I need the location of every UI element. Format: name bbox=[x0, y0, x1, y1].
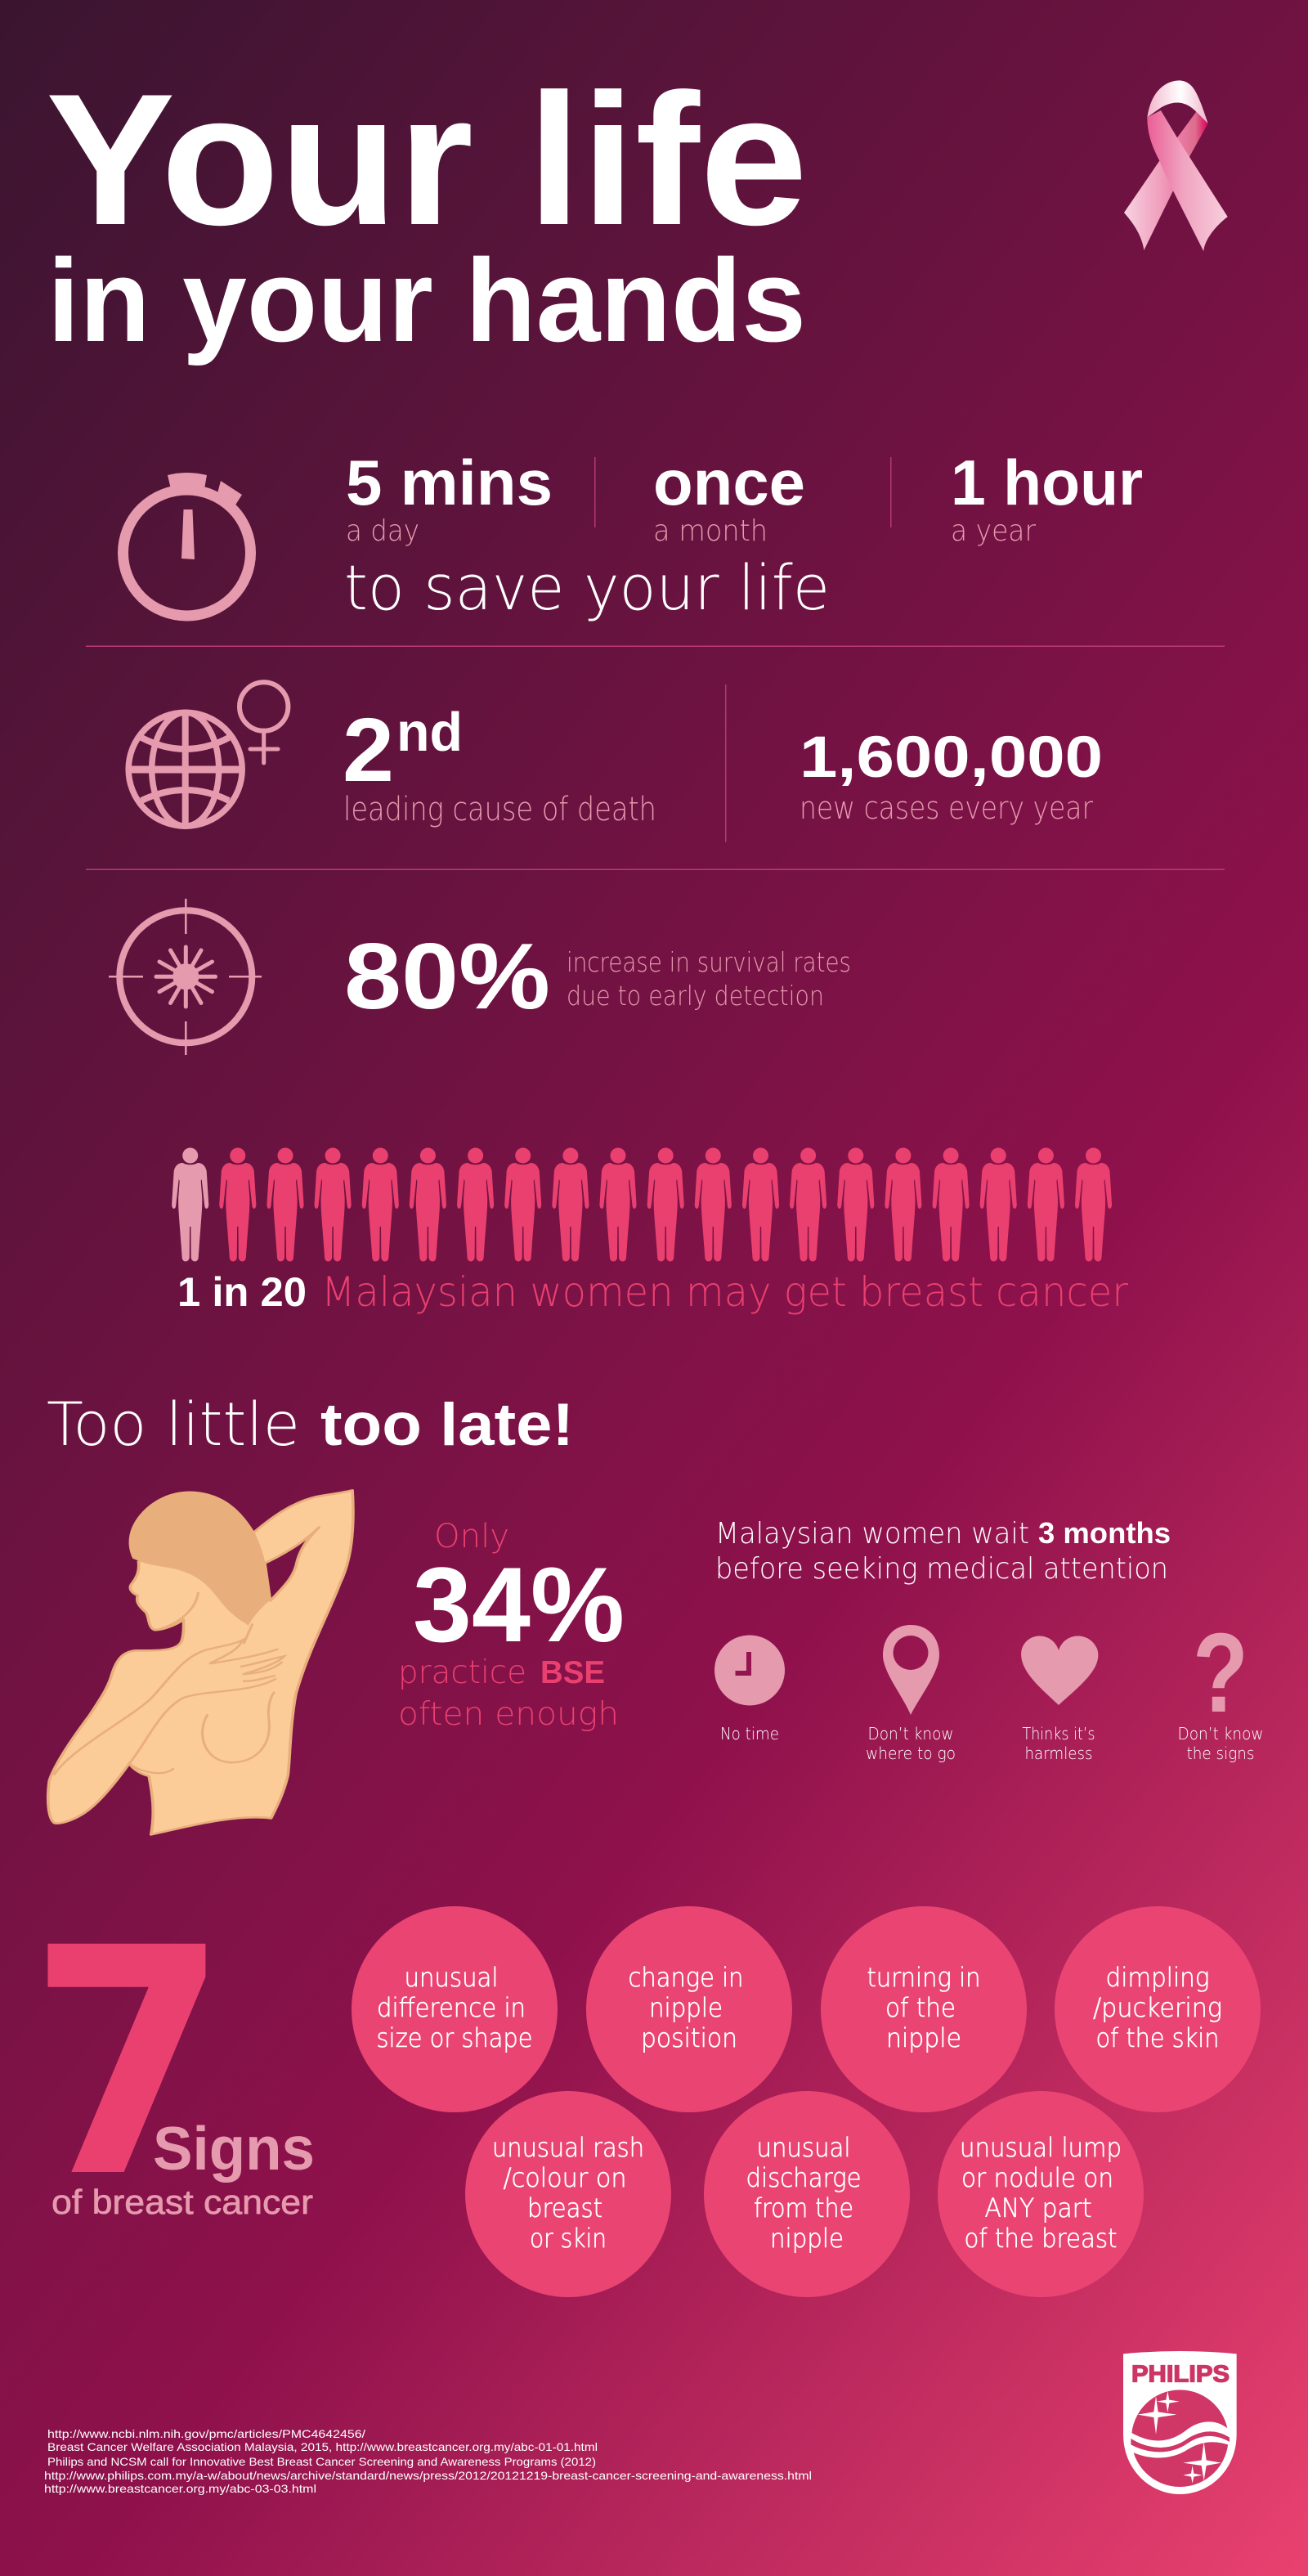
reason: thinks it's harmless: Thinks it’s bbox=[1022, 1724, 1095, 1744]
sign: unusual difference: difference in bbox=[377, 1992, 526, 2023]
stat: only 34% practice BSE: 34% bbox=[413, 1545, 625, 1664]
title: Your life bbox=[46, 55, 808, 264]
title bbox=[46, 55, 808, 366]
sign: unusual difference bbox=[352, 1906, 558, 2112]
text: 1 in 20 Malaysian women: Malaysian women may get breast cancer bbox=[321, 1268, 1128, 1316]
sign: unusual discharge: discharge bbox=[746, 2162, 862, 2193]
text: to save your life: to save your life bbox=[344, 551, 830, 624]
stat: 2nd bbox=[343, 700, 656, 828]
sign: nipple position: change in bbox=[628, 1962, 744, 1993]
sources: Philips and NCSM call for Innovative Best Breast Cancer Screening and Awareness Programs (2012) bbox=[47, 2455, 596, 2468]
text: survival description: increase in survival rates bbox=[567, 946, 851, 978]
sign: unusual lump: or nodule on bbox=[961, 2162, 1113, 2193]
sign: unusual rash bbox=[465, 2091, 671, 2297]
stat: 1,600,000: new cases every year bbox=[800, 790, 1093, 826]
text: women wait 3 months: before seeking medical attention bbox=[715, 1552, 1168, 1586]
sign: unusual discharge: nipple bbox=[770, 2223, 844, 2254]
sign: turning in nipple: of the bbox=[885, 1992, 956, 2023]
heading: 7 signs of breast cancer: Signs bbox=[153, 2114, 315, 2183]
stat: only 34% practice BSE: practice bbox=[398, 1654, 526, 1691]
sign: unusual lump: ANY part bbox=[984, 2192, 1092, 2224]
text: women wait 3 months: 3 months bbox=[1038, 1516, 1171, 1550]
reason: no time bbox=[714, 1636, 785, 1744]
reason: no time: No time bbox=[720, 1724, 779, 1744]
stat: 1,600,000: 1,600,000 bbox=[800, 725, 1103, 790]
stat: only 34% practice BSE: often enough bbox=[398, 1696, 619, 1733]
text: women wait 3 months bbox=[715, 1516, 1171, 1586]
sign: nipple position: position bbox=[641, 2022, 737, 2053]
stat: once a month bbox=[653, 447, 805, 548]
sources bbox=[44, 2427, 812, 2495]
logo: Philips shield bbox=[1123, 2351, 1237, 2494]
stat: 2nd: leading cause of death bbox=[343, 791, 656, 828]
icon: globe with female symbol bbox=[128, 682, 288, 826]
sign: unusual lump: of the breast bbox=[965, 2223, 1117, 2254]
sources: http://www.philips.com.my/a-w/about/news/archive/standard/news/press/2012/20121219-breast-cancer-screening-and-awareness.html bbox=[44, 2469, 812, 2482]
title: in your hands bbox=[47, 235, 806, 366]
reason: thinks it's harmless: harmless bbox=[1025, 1744, 1092, 1763]
sign: unusual rash: /colour on bbox=[504, 2162, 626, 2193]
stat: once a month: once bbox=[653, 447, 805, 518]
icon: map pin bbox=[883, 1625, 939, 1715]
sign: nipple position: nipple bbox=[649, 1992, 723, 2023]
stat: 1 hour a year: a year bbox=[951, 514, 1036, 548]
sign: turning in nipple bbox=[821, 1906, 1027, 2112]
sign: unusual discharge: from the bbox=[754, 2192, 853, 2224]
heading: 7 signs of breast cancer: of breast cancer bbox=[52, 2183, 313, 2221]
sources: http://www.breastcancer.org.my/abc-03-03.html bbox=[44, 2482, 316, 2495]
illustration: woman self-examining bbox=[48, 1490, 353, 1834]
heading: too little too late bbox=[47, 1390, 574, 1460]
stat: 1,600,000 bbox=[800, 725, 1103, 826]
sign: unusual discharge bbox=[704, 2091, 910, 2297]
heading: too little too late: Too little bbox=[47, 1390, 300, 1460]
sign: dimpling: dimpling bbox=[1105, 1962, 1210, 1993]
pictogram: 1 in 20 women bbox=[172, 1148, 1112, 1261]
stat: 80%: 80% bbox=[344, 925, 550, 1029]
reason: don't know the signs: the signs bbox=[1187, 1744, 1254, 1763]
icon: pink ribbon bbox=[1124, 80, 1228, 251]
sign: dimpling: of the skin bbox=[1095, 2022, 1220, 2053]
reason: don't know where to go: where to go bbox=[866, 1744, 956, 1763]
panel: cause of death and new cases bbox=[128, 682, 1103, 828]
sign: unusual lump bbox=[938, 2091, 1144, 2297]
sign: turning in nipple: turning in bbox=[867, 1962, 981, 1993]
stat: 1 hour a year: 1 hour bbox=[951, 447, 1143, 518]
sign: unusual difference: size or shape bbox=[376, 2022, 533, 2053]
sources: http://www.ncbi.nlm.nih.gov/pmc/articles/PMC4642456/ bbox=[47, 2427, 365, 2440]
sign: dimpling bbox=[1055, 1906, 1261, 2112]
heading: 7 signs of breast cancer bbox=[29, 1882, 315, 2246]
reason: don't know the signs: Don’t know bbox=[1177, 1724, 1264, 1744]
icon: heart bbox=[1021, 1636, 1098, 1705]
panel: time to save your life bbox=[123, 447, 1143, 624]
reason: don't know the signs bbox=[1177, 1610, 1264, 1763]
sources: Breast Cancer Welfare Association Malaysia, 2015, http://www.breastcancer.org.my/abc-01-01.html bbox=[47, 2440, 598, 2453]
sign: unusual rash: or skin bbox=[530, 2223, 607, 2254]
contour lines bbox=[54, 1593, 284, 1775]
logo: Philips shield: PHILIPS bbox=[1131, 2361, 1230, 2387]
hair bbox=[129, 1492, 271, 1626]
stat: 5 mins a day bbox=[346, 447, 553, 548]
sign: unusual rash: breast bbox=[527, 2192, 602, 2224]
stat: only 34% practice BSE: Only bbox=[434, 1518, 509, 1555]
stat: only 34% practice BSE bbox=[398, 1518, 625, 1733]
sign: unusual difference: unusual bbox=[404, 1962, 499, 1993]
sign: unusual rash: unusual rash bbox=[492, 2132, 644, 2163]
sign: turning in nipple: nipple bbox=[886, 2022, 961, 2053]
icon: question mark: ? bbox=[1193, 1610, 1248, 1736]
stat: only 34% practice BSE: BSE bbox=[540, 1655, 605, 1690]
stat: 5 mins a day: a day bbox=[346, 514, 419, 548]
reason: thinks it's harmless bbox=[1021, 1636, 1098, 1763]
text: survival description: due to early detection bbox=[567, 980, 824, 1012]
stat: 5 mins a day: 5 mins bbox=[346, 447, 553, 518]
heading: too little too late: too late! bbox=[320, 1392, 574, 1458]
text: survival description bbox=[567, 946, 851, 1012]
heading: 7 signs of breast cancer: 7 bbox=[29, 1882, 228, 2246]
text: 1 in 20 Malaysian women: 1 in 20 bbox=[177, 1269, 307, 1315]
stat: 2nd: nd bbox=[396, 702, 463, 763]
stat: once a month: a month bbox=[653, 514, 768, 548]
icon: clock bbox=[714, 1636, 785, 1706]
sign: unusual discharge: unusual bbox=[757, 2132, 850, 2163]
reason: don't know where to go bbox=[866, 1625, 956, 1763]
reason: don't know where to go: Don’t know bbox=[868, 1724, 953, 1744]
sign: dimpling: /puckering bbox=[1093, 1992, 1222, 2023]
sign: nipple position bbox=[586, 1906, 792, 2112]
panel: survival rates bbox=[109, 899, 851, 1055]
stat: 2nd: 2 bbox=[343, 700, 394, 801]
sign: unusual lump: unusual lump bbox=[960, 2132, 1122, 2163]
text: women wait 3 months: Malaysian women wait bbox=[715, 1517, 1029, 1551]
icon: target with starburst bbox=[109, 899, 262, 1055]
icon: stopwatch bbox=[123, 473, 250, 616]
